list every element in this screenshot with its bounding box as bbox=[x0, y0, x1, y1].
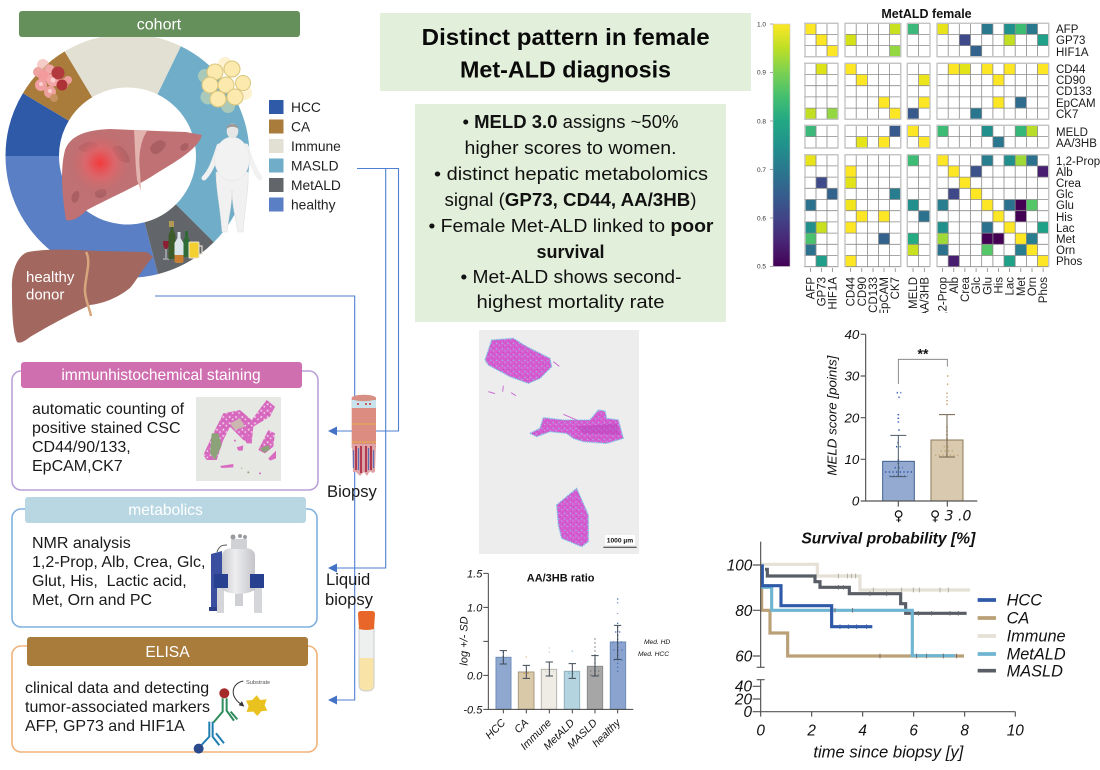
donut segment: Immune bbox=[65, 34, 181, 97]
colour bar: correlation scale: 0.5 bbox=[757, 264, 766, 270]
heatmap row labels: AFP bbox=[1056, 24, 1079, 36]
heatmap row labels: EpCAM bbox=[1056, 98, 1096, 110]
heatmap row labels: Alb bbox=[1056, 167, 1073, 179]
legend: cohort groups: Immune bbox=[291, 139, 341, 154]
heatmap column labels: Crea bbox=[960, 276, 972, 302]
label: Liquid biopsy: biopsy bbox=[325, 590, 374, 609]
heatmap row labels: Glu bbox=[1056, 200, 1074, 212]
heading: cohort bbox=[19, 11, 300, 37]
legend: cohort groups: HCC bbox=[291, 100, 321, 115]
heatmap row labels: CD44 bbox=[1056, 64, 1086, 76]
y axis labels: 20 bbox=[734, 691, 752, 708]
donut segment: MASLD bbox=[158, 46, 250, 242]
heatmap column labels: EpCAM bbox=[879, 277, 891, 317]
y axis labels bbox=[463, 568, 483, 716]
legend: cohort groups: MASLD bbox=[291, 158, 339, 174]
heatmap row labels: GP73 bbox=[1056, 35, 1085, 47]
category labels bbox=[483, 716, 624, 753]
icon: ELISA antibody and substrate bbox=[194, 680, 270, 754]
y axis labels: 1.5 bbox=[467, 568, 483, 580]
heatmap column labels: Orn bbox=[1027, 277, 1039, 296]
icon: person with obesity bbox=[204, 124, 260, 232]
image: liver biopsy histology bbox=[479, 330, 639, 554]
text: clinical data and markers: clinical data and detecting bbox=[25, 680, 209, 697]
title: Distinct pattern: Met-ALD diagnosis bbox=[460, 56, 671, 82]
censor ticks bbox=[835, 574, 958, 658]
heatmap row labels: CD90 bbox=[1056, 75, 1085, 87]
label: healthy donor: healthy bbox=[26, 269, 75, 286]
y axis labels: 100 bbox=[727, 558, 753, 575]
panel: key findings: • Female Met-ALD linked to poor bbox=[428, 216, 714, 236]
y axis labels: 30 bbox=[844, 369, 860, 384]
heatmap row labels: Orn bbox=[1056, 245, 1075, 257]
text: NMR analysis: 1,2-Prop, Alb, Crea, Glc, bbox=[32, 554, 205, 571]
panel: key findings: survival bbox=[536, 242, 604, 262]
category labels: HCC bbox=[483, 717, 508, 742]
survival curves bbox=[761, 564, 970, 656]
icon: fat cells bbox=[198, 57, 252, 113]
heatmap row labels: Glc bbox=[1056, 189, 1074, 201]
label: Biopsy: Biopsy bbox=[327, 482, 378, 501]
y axis labels: 60 bbox=[735, 649, 753, 666]
panel: key findings: • distinct hepatic metabolomics bbox=[434, 164, 708, 184]
category labels: MASLD bbox=[565, 717, 600, 751]
text: CSC counting: EpCAM,CK7 bbox=[32, 458, 123, 475]
axes bbox=[753, 542, 1015, 717]
text: CSC counting: positive stained CSC bbox=[32, 420, 181, 437]
heading: metabolics bbox=[25, 497, 306, 523]
y axis title: MELD score [points] bbox=[824, 355, 839, 476]
y axis labels: 80 bbox=[735, 603, 753, 620]
heatmap column labels bbox=[806, 268, 1047, 313]
text: clinical data and markers: tumor-associated markers bbox=[25, 699, 210, 716]
icon: biopsy tissue cylinder bbox=[352, 395, 376, 476]
heatmap: MetALD female bbox=[800, 7, 1100, 321]
heatmap column labels: AA/3HB bbox=[919, 277, 931, 318]
colour bar: correlation scale: 0.7 bbox=[757, 167, 766, 174]
y axis labels: 0.0 bbox=[467, 670, 483, 682]
median annotations: Med. HD bbox=[644, 639, 670, 646]
heatmap column labels: His bbox=[994, 277, 1006, 294]
x axis title: time since biopsy [y] bbox=[813, 742, 964, 761]
heading: MetALD female: MetALD female bbox=[881, 7, 972, 21]
heatmap column labels: Glc bbox=[971, 277, 983, 294]
icon: NMR spectrometer bbox=[209, 534, 264, 613]
bars bbox=[883, 440, 963, 501]
heatmap row labels: His bbox=[1056, 212, 1073, 224]
y axis labels: 40 bbox=[844, 327, 860, 342]
heading: ELISA bbox=[27, 637, 308, 666]
x axis labels: 6 bbox=[909, 723, 918, 740]
icon: healthy donor liver bbox=[12, 250, 153, 343]
heatmap cells bbox=[805, 23, 1049, 267]
heatmap column labels: CD90 bbox=[857, 277, 869, 306]
heading: metabolics: metabolics bbox=[128, 502, 203, 519]
panel: key findings: highest mortality rate bbox=[476, 292, 664, 312]
chart: MELD score bars: ♀ 3 .0 bbox=[930, 509, 971, 525]
heatmap column labels: HIF1A bbox=[828, 277, 840, 310]
image: liver biopsy histology: 1000 µm bbox=[607, 537, 633, 544]
y axis labels: 20 bbox=[843, 410, 860, 425]
title: Distinct pattern bbox=[380, 13, 751, 91]
axes bbox=[483, 573, 633, 713]
heatmap column labels: CK7 bbox=[890, 277, 902, 299]
colour bar: correlation scale bbox=[757, 22, 790, 270]
heatmap column labels: MELD bbox=[908, 277, 920, 309]
heatmap row labels: MELD bbox=[1056, 127, 1088, 139]
heatmap column labels: Glu bbox=[982, 277, 994, 295]
panel: key findings: • Met-ALD shows second- bbox=[460, 267, 682, 287]
x axis labels: 4 bbox=[858, 723, 867, 740]
legend: CA bbox=[1007, 610, 1029, 628]
x axis labels: 8 bbox=[960, 723, 969, 740]
y axis labels: 0 bbox=[852, 494, 860, 509]
legend: cohort groups: healthy bbox=[291, 198, 336, 212]
donut segment: CA bbox=[23, 51, 92, 121]
y axis labels: -0.5 bbox=[463, 704, 483, 716]
panel: key findings: signal (GP73, CD44, AA/3HB ) bbox=[444, 190, 696, 210]
legend: Immune bbox=[1007, 628, 1066, 646]
error bars bbox=[500, 625, 621, 678]
legend: MetALD bbox=[1007, 646, 1066, 664]
data points bbox=[503, 598, 623, 675]
legend bbox=[978, 592, 1066, 680]
axes bbox=[861, 334, 977, 507]
heading: immunhistochemical staining bbox=[21, 362, 302, 388]
y axis labels: 40 bbox=[735, 679, 752, 696]
icon: tumour cell cluster bbox=[33, 59, 72, 102]
panel: cohort donut bbox=[5, 34, 250, 278]
heatmap row labels: Lac bbox=[1056, 223, 1075, 235]
heading: cohort: cohort bbox=[137, 16, 182, 34]
text: clinical data and markers: AFP, GP73 and HIF1A bbox=[25, 718, 185, 735]
y axis labels bbox=[843, 327, 860, 509]
legend: cohort groups: CA bbox=[291, 120, 311, 134]
category labels: Immune bbox=[518, 717, 554, 753]
text: NMR analysis: Met, Orn and PC bbox=[32, 592, 152, 609]
legend: cohort groups: MetALD bbox=[291, 178, 341, 193]
icon: ELISA antibody and substrate: Substrate bbox=[246, 680, 270, 686]
panel: immunohistochemical staining bbox=[12, 362, 318, 490]
heatmap column labels: 1,2-Prop bbox=[938, 277, 950, 321]
panel: metabolics bbox=[12, 497, 317, 627]
median annotations: Med. HCC bbox=[638, 651, 669, 658]
donut segment: healthy bbox=[6, 156, 158, 278]
icon: blood collection tube bbox=[358, 611, 375, 691]
x axis labels: 0 bbox=[756, 723, 765, 740]
icon: diseased liver bbox=[62, 129, 202, 220]
data points bbox=[885, 376, 959, 476]
panel: key findings: • MELD 3.0 assigns ~50% bbox=[462, 112, 678, 132]
legend: HCC bbox=[1007, 592, 1042, 610]
bars bbox=[496, 642, 626, 709]
panel: ELISA bbox=[12, 637, 317, 754]
heatmap row labels: 1,2-Prop bbox=[1056, 156, 1100, 168]
label: healthy donor: donor bbox=[26, 286, 64, 304]
heatmap column labels: CD44 bbox=[846, 276, 858, 306]
colour bar: correlation scale: 1.0 bbox=[757, 22, 766, 28]
category labels: MetALD bbox=[541, 717, 577, 753]
heatmap column labels: Alb bbox=[949, 277, 961, 294]
heatmap row labels: Met bbox=[1056, 234, 1076, 246]
image: stained tissue thumbnail bbox=[196, 397, 281, 481]
y axis labels: 10 bbox=[844, 452, 860, 467]
heatmap column labels: Met bbox=[1016, 276, 1028, 296]
heatmap column labels: AFP bbox=[806, 277, 818, 299]
y axis labels: 1.0 bbox=[467, 603, 483, 615]
x axis labels bbox=[756, 723, 1024, 740]
legend: cohort groups bbox=[269, 100, 341, 212]
legend: MASLD bbox=[1007, 662, 1063, 680]
x axis labels: 10 bbox=[1007, 723, 1024, 740]
colour bar: correlation scale: 0.6 bbox=[757, 216, 766, 222]
chart: MELD score bars bbox=[824, 327, 977, 525]
colour bar: correlation scale: 0.9 bbox=[757, 70, 766, 76]
text: CSC counting: CD44/90/133, bbox=[32, 439, 131, 456]
text: NMR analysis: NMR analysis bbox=[32, 535, 131, 552]
icon: alcohol bottles bbox=[163, 221, 202, 263]
heatmap row labels bbox=[1056, 24, 1100, 268]
chart title: Survival probability [%] bbox=[801, 530, 976, 547]
chart: survival probability bbox=[727, 530, 1066, 761]
text: NMR analysis: Glut, His, Lactic acid, bbox=[32, 573, 187, 590]
chart title: AA/3HB ratio bbox=[527, 573, 595, 585]
error bars bbox=[890, 415, 955, 477]
heatmap column labels: Lac bbox=[1005, 277, 1017, 296]
x axis labels: 2 bbox=[806, 723, 816, 740]
heatmap row labels: HIF1A bbox=[1056, 47, 1089, 59]
x labels: ♀ bbox=[894, 509, 904, 525]
heading: immunhistochemical staining: immunhistochemical staining bbox=[61, 367, 261, 384]
significance bracket bbox=[898, 345, 947, 384]
y axis labels bbox=[727, 558, 753, 721]
title: Distinct pattern: Distinct pattern in female bbox=[422, 24, 710, 50]
heatmap column labels: Phos bbox=[1038, 277, 1050, 303]
heatmap row labels: AA/3HB bbox=[1056, 138, 1097, 150]
panel: key findings: higher scores to women. bbox=[464, 138, 676, 158]
chart: AA/3HB ratio bars bbox=[459, 568, 670, 753]
text: CSC counting: automatic counting of bbox=[32, 401, 185, 418]
category labels: healthy bbox=[590, 716, 624, 750]
colour bar: correlation scale: 0.8 bbox=[757, 118, 766, 126]
donut segment: MetALD bbox=[145, 204, 214, 274]
heatmap row labels: CK7 bbox=[1056, 109, 1078, 121]
arrows: cohort to sampling to assays bbox=[155, 168, 398, 704]
heatmap row labels: CD133 bbox=[1056, 86, 1092, 98]
heatmap column labels: GP73 bbox=[816, 277, 828, 306]
heatmap row labels: Phos bbox=[1056, 256, 1082, 268]
label: Liquid biopsy: Liquid bbox=[326, 570, 370, 589]
panel: key findings bbox=[415, 104, 726, 322]
heatmap column labels: CD133 bbox=[868, 277, 880, 313]
y axis title: log +/- SD bbox=[459, 616, 471, 666]
category labels: CA bbox=[512, 717, 531, 736]
significance bracket: ** bbox=[918, 345, 929, 361]
y axis labels: 0 bbox=[743, 704, 752, 721]
heading: ELISA: ELISA bbox=[145, 644, 190, 661]
donut segment: HCC bbox=[5, 93, 69, 156]
heatmap row labels: Crea bbox=[1056, 178, 1082, 190]
